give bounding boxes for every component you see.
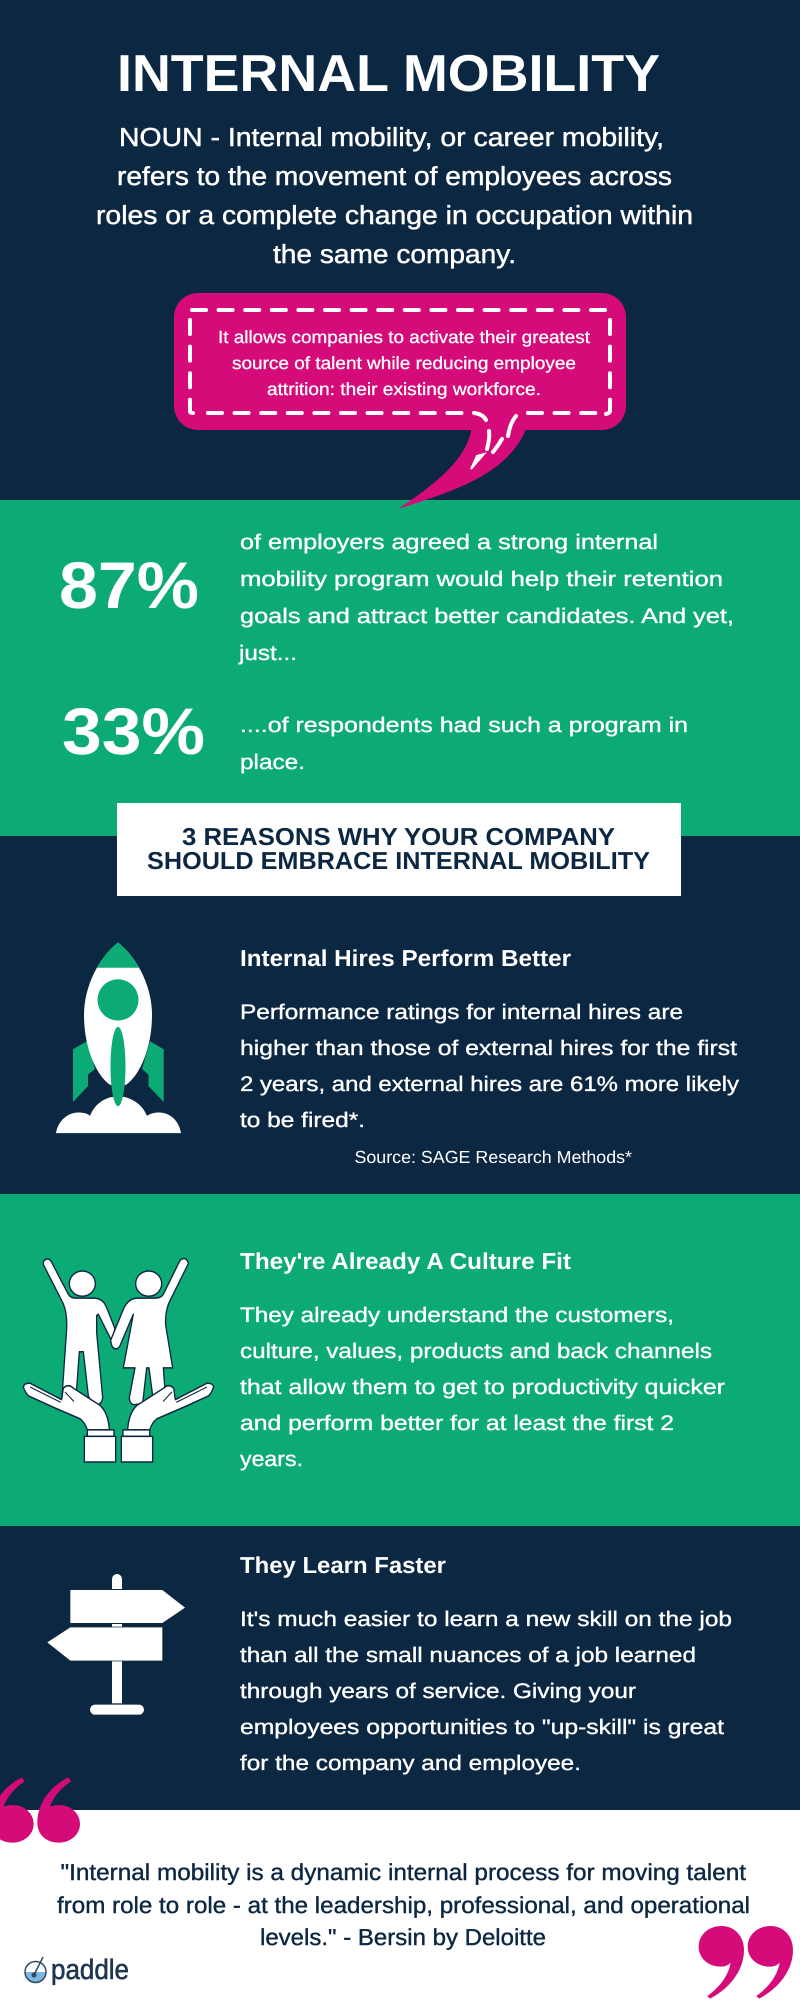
text: reason 2 body: years. xyxy=(240,1448,303,1471)
text: reason 2 body: and perform better for at least the first 2 xyxy=(240,1412,674,1435)
heading banner: 3 reasons: 3 REASONS WHY YOUR COMPANY xyxy=(182,824,615,851)
text: 33% description: ....of respondents had such a program in xyxy=(240,714,688,737)
icon: opening quotation mark xyxy=(0,1777,80,1843)
icon: closing quotation mark xyxy=(699,1926,793,1999)
callout: speech bubble: source of talent while reducing employee xyxy=(232,353,576,373)
heading banner: 3 reasons: SHOULD EMBRACE INTERNAL MOBILITY xyxy=(147,848,650,875)
callout: speech bubble xyxy=(174,293,626,509)
text: reason 3 body: employees opportunities to "up-skill" is great xyxy=(240,1716,724,1739)
text: reason 1 body: higher than those of external hires for the first xyxy=(240,1037,737,1060)
text: reason 1 body xyxy=(240,1001,740,1132)
heading: reason 2: They're Already A Culture Fit xyxy=(240,1248,571,1274)
panel: quote background xyxy=(0,1810,800,2000)
panel: statistics xyxy=(0,500,800,836)
panel: reason 2 background xyxy=(0,1194,800,1526)
text: source note: Source: SAGE Research Methods* xyxy=(354,1147,632,1167)
icon: rocket xyxy=(56,942,181,1133)
text: reason 2 body: culture, values, products and back channels xyxy=(240,1340,712,1363)
icon: people held in hands xyxy=(23,1259,214,1462)
definition text: roles or a complete change in occupation within xyxy=(96,200,693,230)
text: 87% description: goals and attract better candidates. And yet, xyxy=(240,605,734,628)
title: INTERNAL MOBILITY xyxy=(117,45,660,103)
definition text: refers to the movement of employees across xyxy=(117,161,672,191)
text: 87% description: mobility program would help their retention xyxy=(240,568,723,591)
text: reason 2 body xyxy=(240,1304,725,1471)
panel: reason 3 background xyxy=(0,1526,800,1810)
text: reason 3 body: for the company and employee. xyxy=(240,1752,581,1775)
text: quote: "Internal mobility is a dynamic internal process for moving talent xyxy=(60,1859,747,1885)
text: 87% description xyxy=(238,531,734,665)
text: 33% description: place. xyxy=(240,751,305,774)
text: reason 3 body: than all the small nuances of a job learned xyxy=(240,1644,696,1667)
text: 87% description: just... xyxy=(238,642,297,665)
heading banner: 3 reasons xyxy=(117,803,681,896)
callout: speech bubble: attrition: their existing workforce. xyxy=(267,379,541,399)
text: reason 1 body: Performance ratings for internal hires are xyxy=(240,1001,683,1024)
text: 33% description xyxy=(240,714,688,774)
callout: speech bubble: It allows companies to activate their greatest xyxy=(218,327,590,347)
statistic: 87%: 87% xyxy=(59,548,199,622)
text: reason 3 body: through years of service. Giving your xyxy=(240,1680,636,1703)
logo: paddle: paddle xyxy=(51,1954,129,1985)
text: quote: from role to role - at the leadership, professional, and operational xyxy=(57,1892,750,1918)
icon: signpost xyxy=(47,1574,185,1715)
text: reason 2 body: They already understand the customers, xyxy=(240,1304,674,1327)
heading: reason 3: They Learn Faster xyxy=(240,1552,446,1578)
panel: definition header xyxy=(0,0,800,500)
text: quote: levels." - Bersin by Deloitte xyxy=(260,1924,546,1950)
text: reason 2 body: that allow them to get to productivity quicker xyxy=(240,1376,725,1399)
text: reason 3 body xyxy=(240,1608,732,1775)
text: 87% description: of employers agreed a strong internal xyxy=(240,531,658,554)
panel: reason 1 background xyxy=(0,836,800,1194)
text: reason 1 body: to be fired*. xyxy=(240,1109,365,1132)
text: quote xyxy=(57,1859,750,1950)
text: reason 3 body: It's much easier to learn a new skill on the job xyxy=(240,1608,732,1631)
definition text: NOUN - Internal mobility, or career mobility, xyxy=(119,122,664,152)
heading: reason 1: Internal Hires Perform Better xyxy=(240,945,571,971)
text: reason 1 body: 2 years, and external hires are 61% more likely xyxy=(240,1073,740,1096)
definition text xyxy=(96,122,693,269)
definition text: the same company. xyxy=(273,239,516,269)
statistic: 33%: 33% xyxy=(62,694,205,768)
